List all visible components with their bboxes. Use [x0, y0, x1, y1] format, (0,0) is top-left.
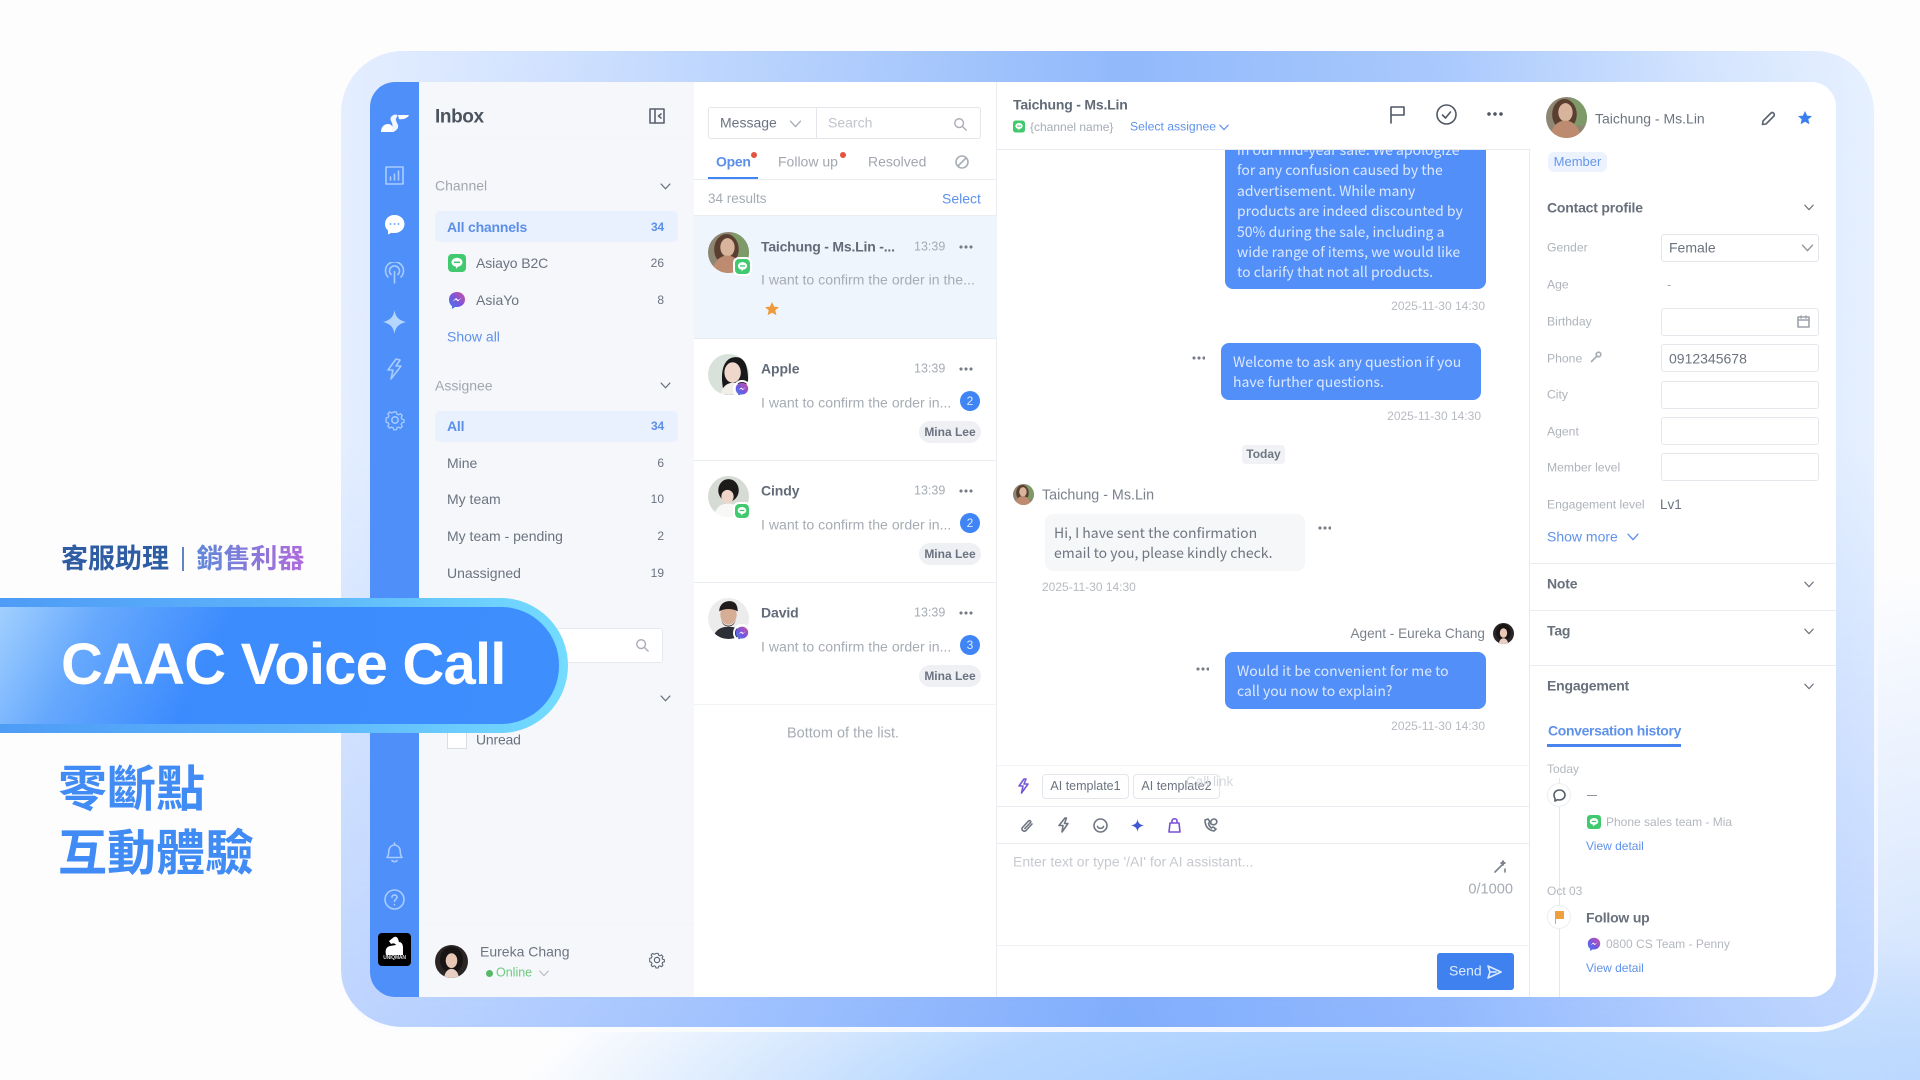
time: 13:39: [914, 240, 945, 254]
tab: conversation history: Conversation history: [1548, 722, 1681, 738]
icon: settings gear: [386, 411, 405, 430]
outgoing message: clarification: wide range of items, we would like: [1237, 242, 1460, 262]
icon: product bag: [1168, 817, 1181, 833]
row: all channels: [435, 211, 678, 242]
tab: resolved: Resolved: [868, 154, 926, 170]
icon: brand logo: [381, 114, 409, 132]
timestamp: 2025-11-30 14:30: [1391, 299, 1485, 313]
chip: AI template2: [1133, 774, 1220, 799]
avatar: Eureka Chang: [435, 945, 468, 978]
unread count: 3: [967, 638, 973, 652]
icon: help: [384, 889, 405, 910]
menu dots: [959, 611, 973, 615]
link: view detail: View detail: [1586, 839, 1644, 853]
row: mine: 6: [657, 456, 664, 470]
icon: flag: [1390, 106, 1405, 124]
panel: conversation list: [694, 82, 997, 997]
assignee tag: Mina Lee: [924, 547, 976, 561]
outgoing message: clarification: advertisement. While many: [1237, 181, 1415, 201]
icon: AI sparkle: [383, 310, 406, 334]
icon: orange star: [765, 302, 779, 316]
character count: 0/1000: [1468, 881, 1513, 897]
AI template row: [1011, 772, 1311, 800]
contact profile form: Female: [1669, 240, 1716, 256]
icon: AI sparkle: [1131, 819, 1144, 832]
timestamp: 2025-11-30 14:30: [1387, 408, 1481, 422]
tabs: [708, 152, 969, 179]
contact name: Cindy: [761, 483, 799, 499]
avatar: [708, 598, 749, 639]
icon: Messenger channel: [1587, 937, 1601, 951]
avatar: [708, 476, 749, 517]
search bar: [708, 107, 981, 139]
icon: inbox chat selected: [385, 215, 404, 234]
field: agent: Agent: [1547, 425, 1579, 439]
label: assignee: Assignee: [435, 378, 493, 394]
field: age: Age: [1547, 278, 1569, 292]
banner inner pill: [0, 607, 559, 724]
row: all: 34: [651, 419, 664, 433]
icon: attach: [1019, 818, 1034, 833]
outgoing message: welcome: have further questions.: [1233, 372, 1384, 392]
outer gradient frame: [341, 51, 1878, 1032]
current user footer: [419, 923, 695, 997]
contact profile form: -: [1667, 277, 1671, 292]
icon: AI bolt: [1016, 778, 1031, 794]
headline: seamless interaction experience: 互動體驗: [58, 827, 254, 881]
tab: follow up: Follow up: [778, 154, 838, 170]
input: search: Search: [828, 115, 872, 131]
incoming message: Hi, I have sent the confirmation: [1054, 523, 1257, 543]
icon: key: [1590, 351, 1602, 363]
row: all: All: [447, 418, 464, 434]
event source: Phone sales team - Mia: [1606, 815, 1732, 829]
message menu: [1318, 526, 1331, 530]
icon: blocked: [955, 155, 969, 169]
icon: user settings: [649, 952, 665, 968]
headline: seamless interaction experience: [58, 758, 263, 886]
link: show all: Show all: [447, 329, 500, 345]
app window: [370, 82, 1836, 997]
panel: inbox filters: [419, 82, 695, 997]
icon: analytics: [385, 166, 404, 185]
row: unassigned: [447, 564, 664, 581]
filter group: assign to and unread: [447, 602, 670, 749]
icon: send arrow: [1487, 965, 1502, 979]
date: Oct 03: Oct 03: [1547, 884, 1582, 898]
panel: navigation sidebar: [370, 82, 419, 997]
channel badge: [733, 502, 749, 518]
row: my team: [447, 491, 664, 507]
outgoing message: call offer: call you now to explain?: [1237, 681, 1392, 701]
outgoing message: welcome: [1221, 343, 1481, 400]
row: AsiaYo: [476, 292, 664, 308]
row: AsiaYo: 8: [657, 293, 664, 307]
icon: favourite star: [1798, 111, 1812, 125]
message preview: I want to confirm the order in...: [761, 639, 951, 655]
send button: Send: [1449, 963, 1482, 979]
icon: follow up flag event: [1547, 905, 1571, 929]
link: view detail: View detail: [1586, 961, 1644, 975]
heading: tag: Tag: [1547, 623, 1570, 639]
row: my team pending: 2: [657, 529, 664, 543]
field: birthday: Birthday: [1547, 314, 1592, 328]
panel: contact details: [1530, 82, 1836, 997]
time: 13:39: [914, 362, 945, 376]
message preview: I want to confirm the order in...: [761, 395, 951, 411]
search box: [448, 628, 663, 663]
contact profile form: [1547, 227, 1819, 552]
message preview: I want to confirm the order in...: [761, 517, 951, 533]
filter group: channel: [435, 178, 678, 345]
timestamp: 2025-11-30 14:30: [1391, 718, 1485, 732]
icon: emoji: [1093, 818, 1108, 833]
assignee tag: [919, 543, 981, 565]
composer toolbar: [1013, 815, 1233, 835]
label: unread: Unread: [476, 732, 521, 748]
link: select: Select: [942, 191, 981, 207]
heading: Inbox: Inbox: [435, 107, 484, 128]
row: mine: Mine: [447, 454, 477, 470]
icon: Uniqman workspace logo: UNIQMAN: [383, 955, 406, 961]
send button: [1437, 953, 1514, 990]
field: gender: Gender: [1547, 241, 1588, 255]
customer avatar: [1013, 484, 1034, 505]
icon: quick reply: [1057, 817, 1070, 833]
agent avatar: [1493, 623, 1514, 644]
icon: more: [1487, 112, 1503, 116]
headline: seamless interaction experience: 零斷點: [58, 763, 205, 817]
outgoing message: clarification: [1225, 150, 1486, 289]
unread count: 2: [967, 516, 973, 530]
timeline: [1547, 759, 1819, 997]
message menu: [1196, 667, 1209, 671]
chat header: [997, 82, 1530, 150]
label: channel: Channel: [435, 178, 487, 194]
chip: AI template2: AI template2: [1141, 779, 1212, 793]
row: my team: My team: [447, 491, 501, 507]
tab: conversation history: [1547, 717, 1681, 747]
chip: AI template1: [1042, 774, 1129, 799]
assignee tag: Mina Lee: [924, 669, 976, 683]
row: unassigned: Unassigned: [447, 564, 521, 580]
active tab underline: [708, 177, 758, 180]
field: city: City: [1547, 388, 1568, 402]
time: 13:39: [914, 484, 945, 498]
menu dots: [959, 489, 973, 493]
contact profile form: Lv1: [1660, 497, 1682, 512]
icon: LINE channel: [1587, 815, 1601, 829]
outgoing message: clarification: products are indeed discounted by: [1237, 201, 1463, 221]
message preview: I want to confirm the order in the...: [761, 272, 975, 288]
conversation item: Taichung: [694, 216, 997, 338]
icon: automation bolt: [387, 358, 402, 380]
conversation item: Apple: [708, 354, 981, 443]
link: show more: Show more: [1547, 529, 1618, 545]
time: 13:39: [914, 606, 945, 620]
unread count: 2: [967, 394, 973, 408]
icon: voice call: [1203, 817, 1218, 833]
slogan: assistant and sales tool: 客服助理 銷售利器: [61, 544, 304, 574]
heading: engagement: Engagement: [1547, 678, 1629, 694]
outgoing message: call offer: Would it be convenient for me to: [1237, 661, 1449, 681]
contact avatar: [1546, 97, 1587, 138]
row: mine: [447, 454, 664, 470]
menu dots: [959, 367, 973, 371]
avatar: [708, 232, 749, 273]
contact name: David: [761, 605, 799, 621]
filter group: assignee: [435, 378, 678, 581]
icon: edit: [1761, 111, 1776, 126]
user name: Eureka Chang: [480, 944, 570, 960]
unread count: [960, 391, 980, 411]
icon: calendar: [1797, 315, 1810, 328]
assignee tag: Mina Lee: [924, 425, 976, 439]
icon: LINE channel: [448, 254, 466, 272]
select assignee: Select assignee: [1130, 120, 1216, 134]
event source: 0800 CS Team - Penny: [1606, 937, 1730, 951]
icon: channel: [1013, 120, 1025, 132]
customer name: Taichung - Ms.Lin: [1042, 487, 1154, 503]
icon: chat event: [1547, 783, 1571, 807]
row: unassigned: 19: [651, 566, 664, 580]
banner: product title: [0, 598, 568, 733]
channel badge: [733, 380, 748, 396]
panel: chat thread: [997, 82, 1530, 997]
results count: 34 results: [708, 191, 767, 206]
channel badge: [733, 257, 752, 276]
channel name: {channel name}: [1030, 120, 1113, 134]
unread count: [960, 513, 980, 533]
tag: member: [1548, 152, 1607, 172]
conversation item: Cindy: [708, 476, 981, 565]
agent name: Agent - Eureka Chang: [1350, 626, 1485, 641]
contact name: Apple: [761, 361, 799, 377]
tab: open: Open: [716, 154, 751, 170]
icon: Messenger channel: [449, 292, 465, 309]
field: phone: Phone: [1547, 351, 1582, 365]
row: all channels: All channels: [447, 218, 527, 234]
chip: AI template1: AI template1: [1050, 779, 1121, 793]
assignee tag: [919, 421, 981, 443]
end of list note: Bottom of the list.: [787, 725, 899, 741]
outgoing message: welcome: Welcome to ask any question if you: [1233, 352, 1461, 372]
conversation item: David: [708, 598, 981, 687]
label: assign to: Assign to: [448, 602, 506, 618]
date pill: [1242, 445, 1285, 464]
menu dots: [959, 245, 973, 249]
contact profile form: 0912345678: [1669, 350, 1747, 366]
icon: collapse panel: [649, 108, 665, 124]
incoming message: [1045, 514, 1305, 571]
current user footer: Online: [496, 966, 532, 980]
row: all channels: 34: [651, 220, 664, 234]
icon: magic wand: [1493, 860, 1507, 874]
heading: note: Note: [1547, 576, 1577, 592]
row: Asiayo B2C: Asiayo B2C: [476, 255, 548, 271]
message input placeholder: Enter text or type '/AI' for AI assistant...: [1013, 854, 1253, 870]
incoming message: email to you, please kindly check.: [1054, 543, 1273, 563]
unread count: [960, 635, 980, 655]
row: AsiaYo: AsiaYo: [476, 292, 519, 308]
field: engagement level: Engagement level: [1547, 498, 1645, 512]
icon: notification bell: [386, 842, 403, 862]
assignee tag: [919, 665, 981, 687]
checkbox: unread: [447, 729, 467, 749]
event title dash: [1587, 795, 1597, 796]
timestamp: 2025-11-30 14:30: [1042, 579, 1136, 593]
contact name: Taichung - Ms.Lin: [1013, 97, 1128, 113]
contact name: Taichung - Ms.Lin: [1595, 111, 1705, 127]
outgoing message: clarification: 50% during the sale, including a: [1237, 222, 1444, 242]
row: Asiayo B2C: 26: [651, 256, 664, 270]
tag: member: Member: [1554, 154, 1601, 169]
date pill: Today: [1246, 447, 1281, 461]
status: online: [486, 970, 493, 977]
outgoing message: call offer: [1225, 652, 1486, 709]
date: today: Today: [1547, 762, 1579, 776]
row: all: [435, 410, 678, 442]
faded call link: Call link: [1186, 774, 1233, 789]
dropdown: message: Message: [720, 115, 777, 131]
contact name: Taichung - Ms.Lin -...: [761, 239, 895, 255]
message menu: [1192, 356, 1205, 360]
field: member level: Member level: [1547, 461, 1620, 475]
heading: contact profile: Contact profile: [1547, 199, 1643, 215]
row: Asiayo B2C: [476, 255, 664, 271]
row: my team: 10: [651, 492, 664, 506]
row: my team pending: My team - pending: [447, 528, 563, 544]
outgoing message: clarification: to clarify that not all products.: [1237, 262, 1433, 282]
avatar: [708, 354, 749, 395]
channel badge: [733, 624, 748, 640]
outgoing message: clarification: for any confusion caused by the: [1237, 160, 1443, 180]
row: my team pending: [447, 528, 664, 544]
title text: CAAC Voice Call: [61, 632, 506, 697]
icon: resolved check: [1436, 104, 1457, 125]
icon: Uniqman workspace logo: [378, 933, 411, 966]
event title: Follow up: [1586, 910, 1650, 926]
icon: broadcast: [384, 262, 404, 284]
